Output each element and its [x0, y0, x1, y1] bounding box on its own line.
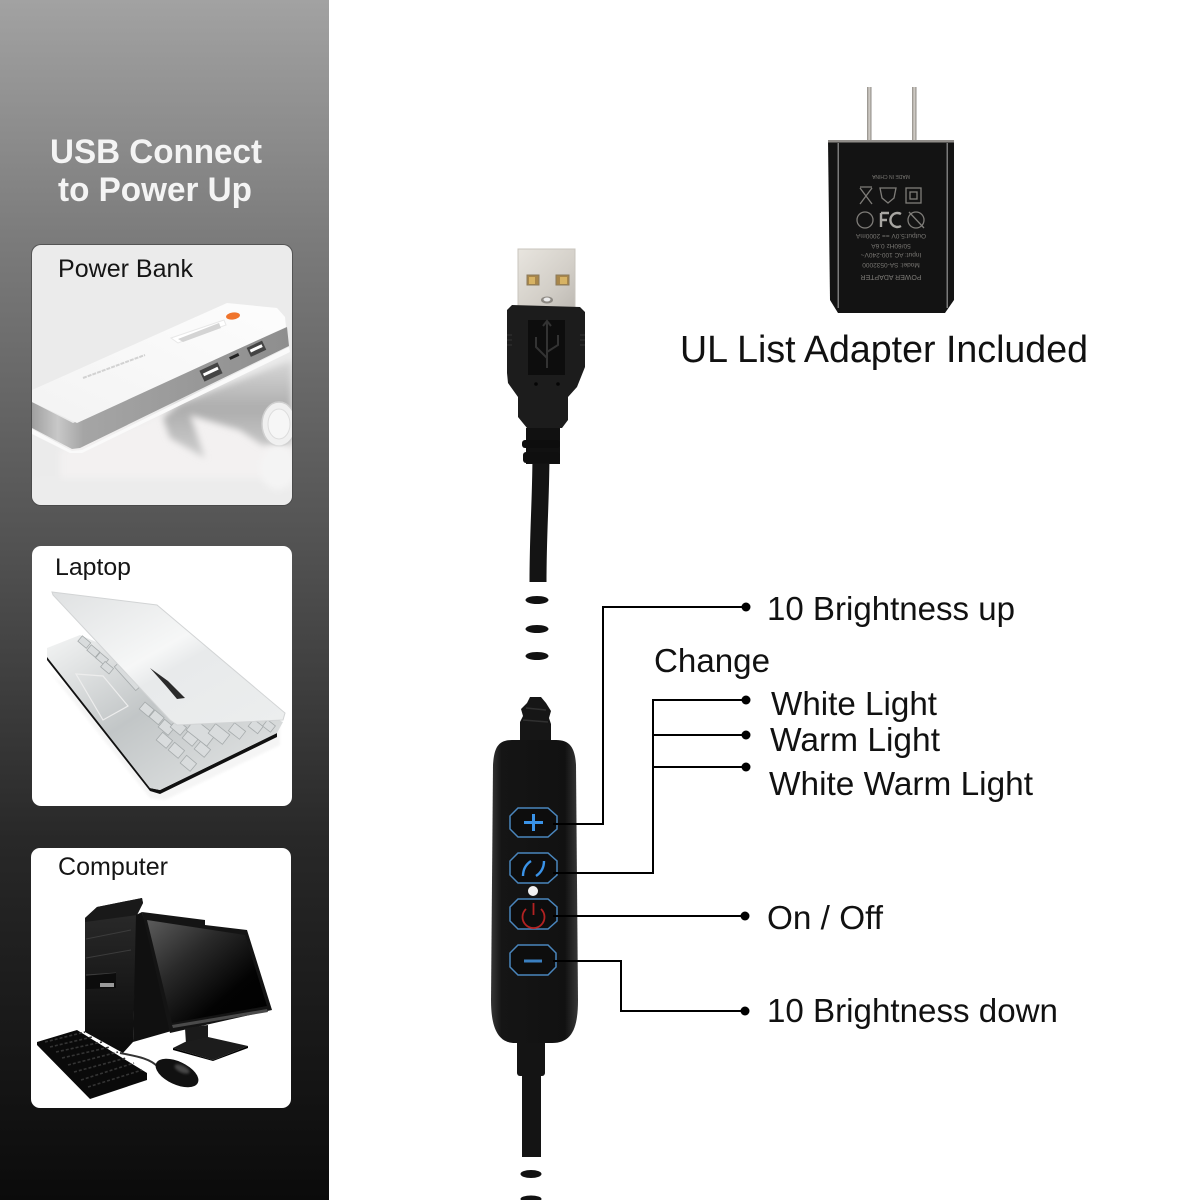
- heading: USB Connect to Power Up: to Power Up: [58, 171, 252, 209]
- button: change colour: [510, 853, 557, 883]
- indicator light: [528, 886, 538, 896]
- heading: USB Connect to Power Up: USB Connect: [50, 133, 262, 171]
- icon: inline controller: [491, 697, 578, 1157]
- cable break dashes: [520, 596, 548, 1200]
- callout labels: White Warm Light: [769, 765, 1033, 802]
- icon: power adapter: POWER ADAPTER: [860, 273, 922, 280]
- callout labels: Warm Light: [770, 721, 940, 758]
- label: Computer: Computer: [58, 853, 168, 881]
- callout labels: 10 Brightness up: [767, 590, 1015, 627]
- label: Power Bank: Power Bank: [58, 255, 193, 283]
- callout labels: 10 Brightness down: [767, 992, 1058, 1029]
- leader dots: [740, 602, 750, 1016]
- icon: power adapter: [828, 87, 954, 313]
- card: laptop: [32, 546, 292, 806]
- card: computer: [31, 848, 291, 1108]
- card: power bank: [31, 244, 296, 506]
- icon: power adapter: 50/60Hz 0.6A: [871, 242, 911, 249]
- icon: power adapter: Output:5.0V == 2000mA: [855, 232, 926, 239]
- leader lines: [553, 607, 745, 1011]
- callout labels: White Light: [771, 685, 937, 722]
- callout labels: [654, 590, 1058, 1029]
- callout labels: Change: [654, 642, 770, 679]
- icon: power adapter: Input: AC 100-240V~: [861, 251, 921, 258]
- button: brightness up: [510, 808, 557, 837]
- heading: UL List Adapter Included: UL List Adapter Included: [680, 329, 1088, 371]
- button: brightness down: [510, 945, 556, 975]
- heading: USB Connect to Power Up: [50, 133, 262, 209]
- button: power: [510, 899, 557, 929]
- icon: USB plug and cable: [507, 249, 585, 582]
- panel: left sidebar: [0, 0, 329, 1200]
- label: Laptop: Laptop: [55, 554, 131, 581]
- icon: power adapter: MADE IN CHINA: [871, 173, 910, 179]
- callout labels: On / Off: [767, 899, 884, 936]
- icon: power adapter: Model: SA-0532000: [862, 261, 920, 268]
